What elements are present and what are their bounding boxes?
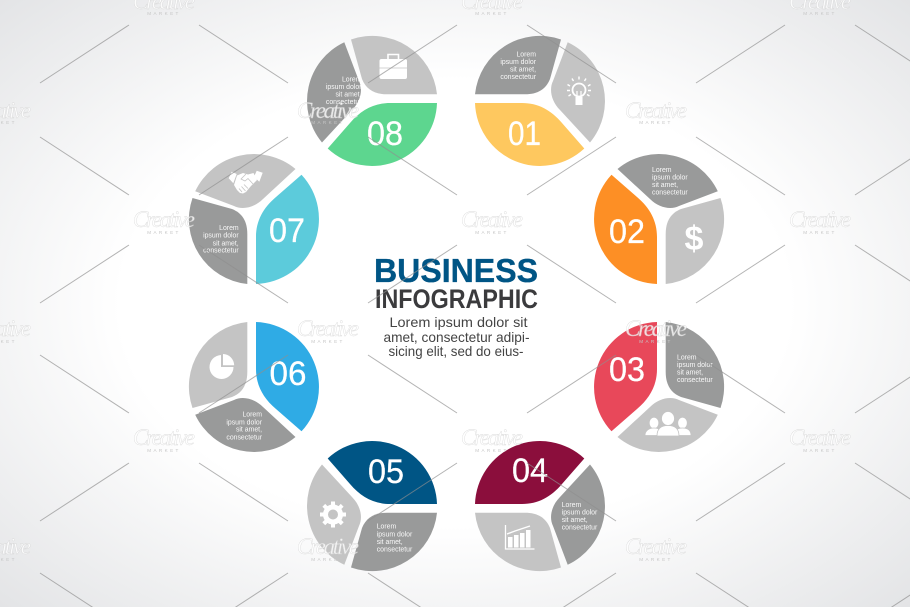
watermark text: Creative — [789, 425, 851, 450]
text block 08: Lorem — [342, 77, 362, 84]
watermark text: Creative — [625, 98, 687, 123]
text block 08: consectetur — [326, 99, 362, 106]
text block 07: sit amet, — [213, 240, 239, 247]
text block 03: sit amet, — [677, 370, 703, 376]
watermark text: MARKET — [147, 230, 181, 235]
text block 06: consectetur — [226, 434, 263, 441]
text block 07: Lorem — [219, 225, 239, 232]
segment: 06 text — [195, 398, 296, 452]
segment: 04 text — [551, 464, 605, 565]
text block 01: Lorem — [516, 51, 536, 58]
segment: 06 colour — [256, 322, 319, 431]
watermark text: MARKET — [803, 448, 837, 453]
panel: step 05 — [307, 441, 437, 571]
panel: step 03 — [594, 322, 724, 452]
heading: INFOGRAPHIC: INFOGRAPHIC — [375, 284, 538, 314]
text block 02: Lorem — [652, 167, 672, 174]
text block 01: consectetur — [500, 74, 537, 81]
text block 06: Lorem — [242, 412, 262, 419]
number 01: 01 — [508, 115, 541, 153]
panel: step 02 — [594, 154, 724, 284]
text block 01: sit amet, — [510, 66, 536, 73]
text block 04: ipsum dolor — [562, 510, 598, 517]
segment: 04 icon — [475, 513, 561, 571]
panel: step 01 — [475, 36, 605, 166]
watermark text: MARKET — [147, 448, 181, 453]
segment: 04 colour — [475, 441, 584, 504]
text block 01: ipsum dolor — [500, 59, 537, 66]
watermark text: Creative — [789, 207, 851, 232]
segment: 01 icon — [551, 42, 605, 143]
text block 04: sit amet, — [562, 517, 588, 524]
segment: 02 text — [618, 154, 718, 208]
watermark text: MARKET — [475, 11, 509, 16]
segment: 05 colour — [328, 441, 437, 504]
text block 03: ipsum dolor — [677, 362, 713, 369]
text block 04: consectetur — [562, 525, 598, 532]
number 06: 06 — [270, 355, 306, 393]
segment: 01 text — [475, 36, 561, 94]
text block 05: sit amet, — [377, 539, 403, 546]
segment: 02 icon — [666, 198, 724, 284]
segment: 07 colour — [256, 175, 319, 284]
text block 03: Lorem — [677, 354, 697, 362]
icon: people — [645, 412, 691, 436]
icon: briefcase — [380, 54, 407, 79]
icon: bar chart — [506, 525, 534, 549]
icon: light bulb — [567, 76, 591, 105]
watermark text: Creative — [133, 207, 195, 232]
watermark text: MARKET — [147, 11, 181, 16]
text block: description: sicing elit, sed do eius- — [388, 343, 524, 359]
text block 07: ipsum dolor — [203, 233, 239, 240]
panel: step 06 — [189, 322, 319, 452]
number 04: 04 — [512, 452, 548, 490]
panel: step 08 — [307, 36, 437, 166]
icon: handshake — [229, 171, 263, 194]
text block 02: ipsum dolor — [652, 174, 688, 182]
text block 05: ipsum dolor — [377, 531, 413, 538]
icon: dollar: $ — [685, 220, 704, 258]
watermark text: Creative — [297, 534, 359, 559]
segment: 01 colour — [475, 103, 584, 166]
text block: description: Lorem ipsum dolor sit — [390, 314, 528, 330]
text block 02: sit amet, — [652, 182, 678, 189]
segment: 08 text — [307, 42, 361, 143]
number 03: 03 — [609, 351, 645, 389]
heading: BUSINESS: BUSINESS — [374, 252, 538, 289]
watermark text: Creative — [297, 98, 359, 123]
watermark text: MARKET — [475, 230, 509, 235]
number 05: 05 — [368, 453, 404, 491]
watermark text: MARKET — [311, 120, 345, 125]
segment: 08 icon — [351, 36, 437, 94]
segment: 06 icon — [189, 322, 247, 408]
segment: 08 colour — [328, 103, 437, 166]
watermark text: MARKET — [475, 448, 509, 453]
icon: gear — [320, 502, 346, 528]
text block 06: ipsum dolor — [226, 419, 263, 426]
watermark text: MARKET — [803, 11, 837, 16]
segment: 05 text — [351, 513, 437, 571]
watermark text: Creative — [461, 207, 523, 232]
segment: 02 colour — [594, 175, 657, 284]
segment: 03 text — [666, 322, 724, 408]
watermark text: Creative — [297, 316, 359, 341]
segment: 03 colour — [594, 322, 657, 431]
number 08: 08 — [367, 115, 403, 153]
text block 06: sit amet, — [236, 427, 262, 434]
watermark text: MARKET — [639, 557, 673, 562]
watermark text: Creative — [625, 534, 687, 559]
watermark text: MARKET — [639, 339, 673, 344]
watermark text: MARKET — [639, 120, 673, 125]
text block 02: consectetur — [652, 190, 688, 197]
watermark text: Creative — [133, 425, 195, 450]
panel: step 04 — [475, 441, 605, 571]
number 07: 07 — [269, 212, 305, 250]
text block 08: ipsum dolor — [326, 84, 362, 91]
title: centre heading — [374, 252, 538, 359]
watermark text: Creative — [461, 425, 523, 450]
watermark text: MARKET — [803, 230, 837, 235]
text block 03: consectetur — [677, 377, 713, 384]
text block: description: amet, consectetur adipi- — [384, 329, 530, 345]
number 02: 02 — [609, 213, 645, 251]
watermark text: MARKET — [311, 339, 345, 344]
text block 05: Lorem — [377, 524, 396, 531]
text block 05: consectetur — [377, 546, 413, 553]
segment: 07 text — [189, 198, 247, 284]
text block 07: consectetur — [203, 248, 239, 255]
segment: 05 icon — [307, 464, 361, 565]
icon: pie chart — [210, 354, 234, 379]
watermark text: Creative — [625, 316, 687, 341]
segment: 07 icon — [195, 154, 296, 208]
text block 08: sit amet, — [335, 92, 362, 99]
watermark text: MARKET — [311, 557, 345, 562]
segment: 03 icon — [618, 398, 718, 452]
panel: step 07 — [189, 154, 319, 284]
text block 04: Lorem — [562, 502, 581, 509]
